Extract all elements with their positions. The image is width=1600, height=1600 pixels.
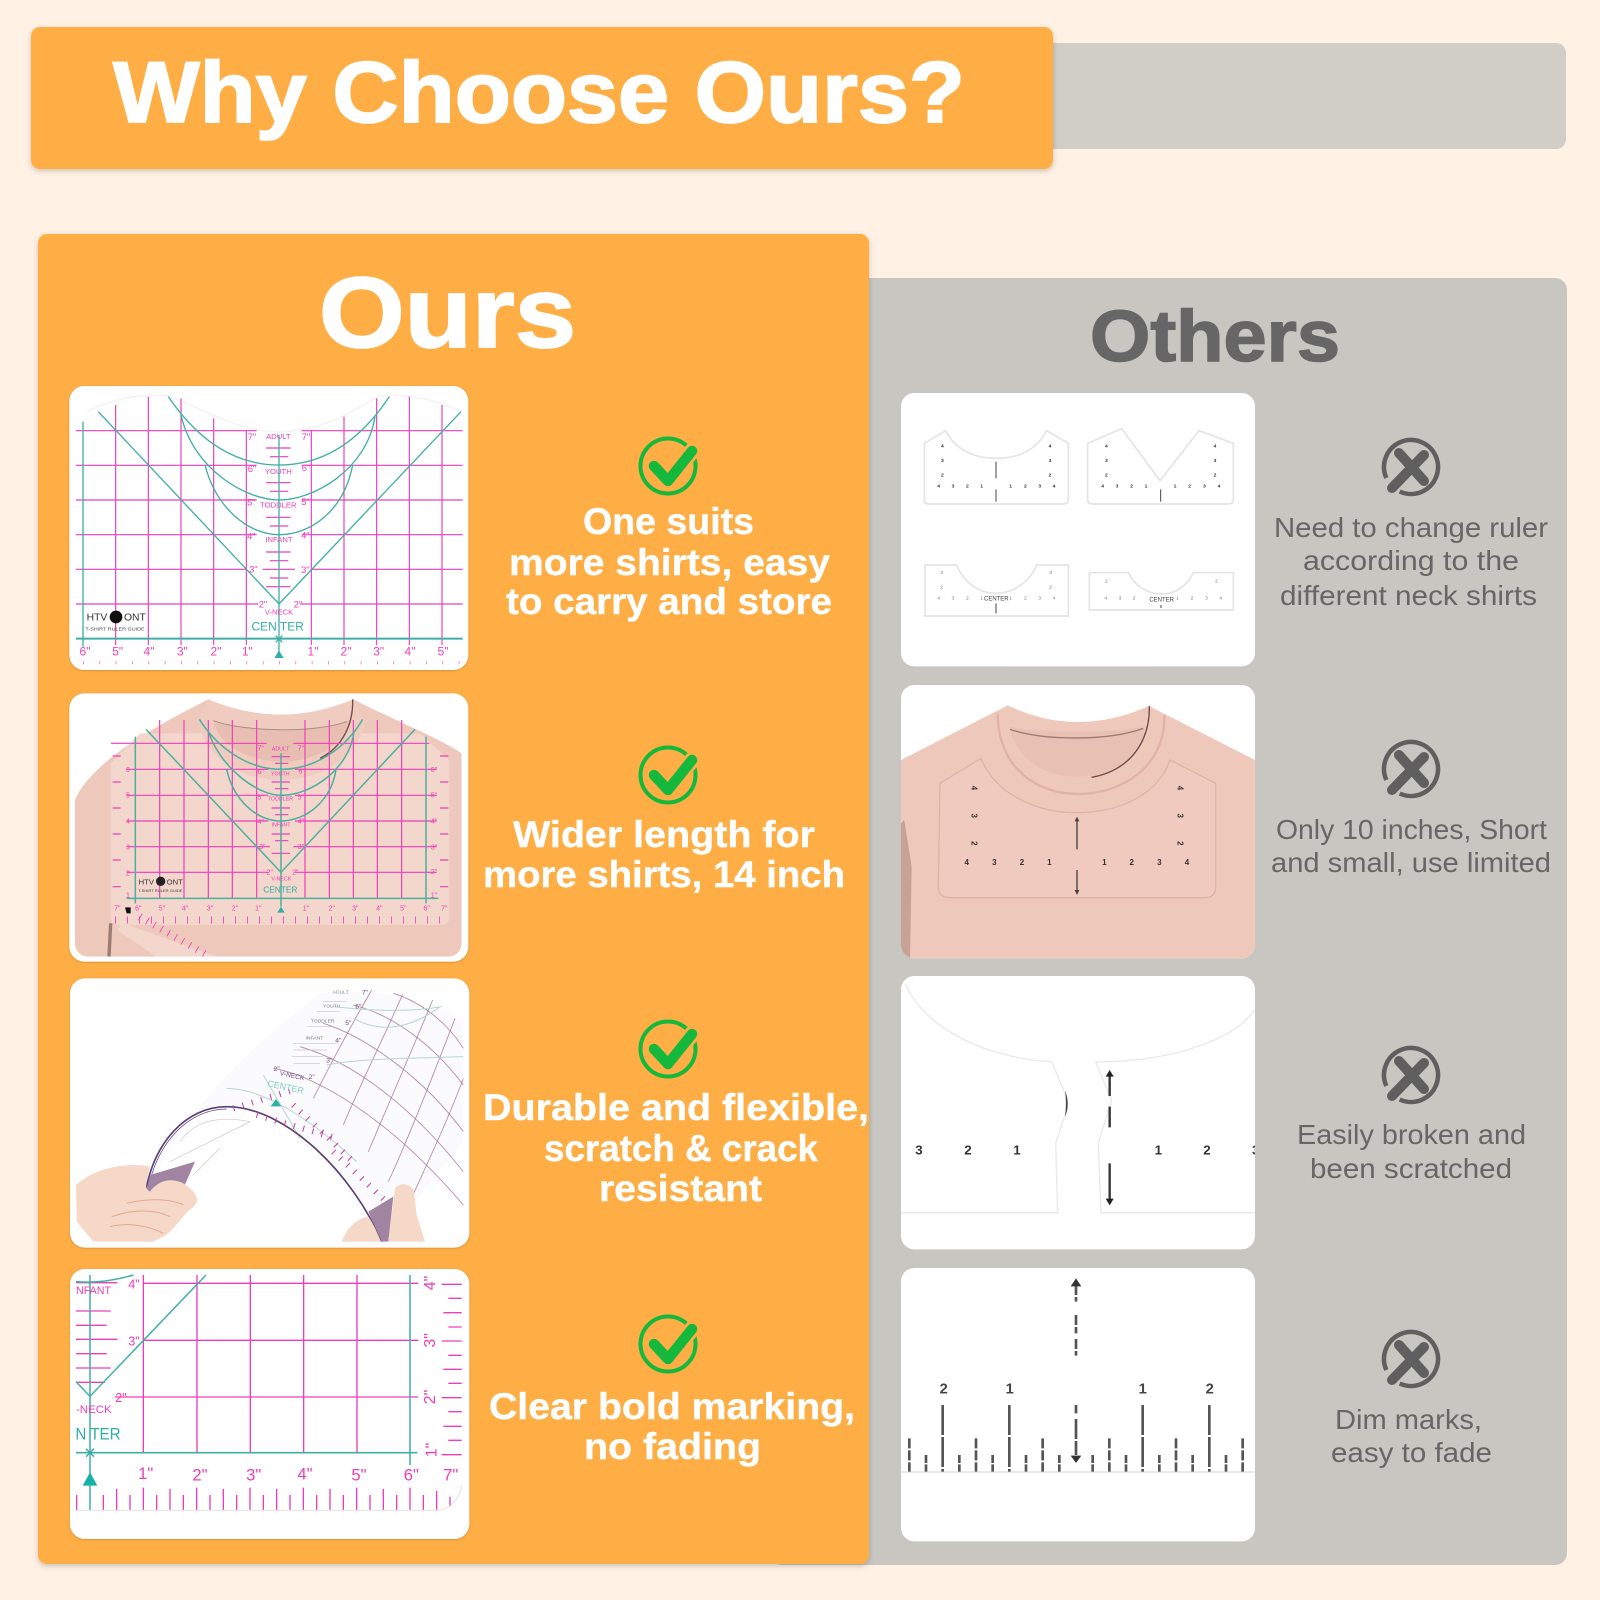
card: four small rulers: 2 xyxy=(1214,473,1217,479)
card: bending flexible ruler: 7" xyxy=(362,989,369,996)
card: ruler on pink shirt: 2 xyxy=(126,870,130,877)
text: dim marks: easy to fade xyxy=(1331,1437,1492,1468)
card: ruler on pink shirt: 4 xyxy=(126,818,130,825)
text: wider length: more shirts, 14 inch xyxy=(483,854,845,895)
card: ruler diagram: 2" xyxy=(294,599,302,609)
logo: HTV xyxy=(87,613,107,624)
text: need to change ruler: different neck shirts xyxy=(1280,580,1537,611)
card: ruler diagram: 3" xyxy=(177,645,188,659)
card: broken ruler closeup xyxy=(901,976,1259,1249)
card: ruler closeup: 4" xyxy=(422,1276,439,1290)
card: four small rulers: 3 xyxy=(1119,595,1122,601)
card: dim ruler marks xyxy=(901,1268,1255,1541)
card: short ruler on pink shirt xyxy=(901,685,1255,958)
heading: others: Others xyxy=(1090,297,1340,377)
card: four small rulers: 2 xyxy=(1191,595,1194,601)
card: four small rulers: 2 xyxy=(1049,473,1052,479)
card: broken ruler closeup: 2 xyxy=(1203,1142,1211,1157)
card: ruler on pink shirt: 3" xyxy=(259,844,266,851)
card: bending flexible ruler: 2" xyxy=(274,1066,280,1073)
text: only 10 inches: Only 10 inches, Short xyxy=(1276,814,1547,845)
card: ruler on pink shirt: 1" xyxy=(431,892,438,899)
title: Why Choose Ours? xyxy=(113,45,965,141)
card: ruler closeup: 1" xyxy=(424,1443,441,1457)
card: ruler closeup: -NECK xyxy=(76,1404,112,1416)
card: ruler diagram: 5" xyxy=(247,498,256,508)
text: easily broken: Easily broken and xyxy=(1297,1119,1526,1150)
card: ruler diagram: 6" xyxy=(80,645,90,659)
card: bending flexible ruler: 6" xyxy=(355,1003,362,1010)
card: four small rulers: 4 xyxy=(1049,444,1052,450)
text: durable and flexible: Durable and flexible, xyxy=(483,1087,869,1128)
card: bending flexible ruler: V-NECK xyxy=(279,1070,305,1082)
card: ruler diagram: 6" xyxy=(302,463,310,473)
card: bending flexible ruler: 2" xyxy=(309,1074,315,1081)
card: ruler diagram: 7" xyxy=(302,432,310,442)
card: ruler on pink shirt: T-SHIRT RULER GUIDE xyxy=(138,889,183,893)
card: ruler on pink shirt: ONT xyxy=(167,877,183,886)
card: four small rulers: CENTER xyxy=(984,597,1009,603)
card: broken ruler closeup: 1 xyxy=(1155,1142,1163,1157)
text: clear bold marking: no fading xyxy=(584,1426,761,1467)
card: ruler closeup: 3" xyxy=(422,1333,439,1348)
card: bending flexible ruler: 5" xyxy=(345,1020,352,1027)
card: ruler on pink shirt: 2" xyxy=(232,906,239,913)
icon: check 3 xyxy=(640,1022,696,1076)
text: dim marks: Dim marks, xyxy=(1335,1404,1482,1435)
card: four small rulers: 2 xyxy=(1133,595,1136,601)
card: dim ruler marks: 1 xyxy=(1006,1381,1014,1397)
card: ruler closeup: NFANT xyxy=(76,1285,111,1297)
card: ruler on pink shirt: 7" xyxy=(114,906,121,913)
card: ruler on pink shirt: 6" xyxy=(135,906,142,913)
text: only 10 inches xyxy=(1271,814,1551,878)
card: ruler diagram: ADULT xyxy=(266,432,291,441)
card: four small rulers: 3 xyxy=(1038,483,1041,489)
card: ruler on pink shirt: ADULT xyxy=(272,746,290,752)
card: ruler on pink shirt: 2" xyxy=(266,869,273,876)
text: wider length: Wider length for xyxy=(513,814,815,855)
card: ruler on pink shirt: 6" xyxy=(431,767,438,774)
logo: T-SHIRT RULER GUIDE xyxy=(85,626,145,632)
card: ruler on pink shirt: 4" xyxy=(257,819,264,826)
card: ruler diagram: 4" xyxy=(301,531,310,541)
card: four small rulers: 1 xyxy=(1145,483,1148,489)
card: four small rulers: 3 xyxy=(1205,595,1208,601)
heading: ours: Ours xyxy=(319,257,576,369)
card: ruler diagram: 5" xyxy=(112,645,123,659)
card: bending flexible ruler: CENTER xyxy=(267,1078,305,1096)
text: wider length xyxy=(483,814,845,895)
logo xyxy=(85,611,146,632)
card: ruler on pink shirt: YOUTH xyxy=(271,772,290,778)
card: ruler on pink shirt: 1" xyxy=(303,906,310,913)
card: four small rulers: CENTER xyxy=(1149,598,1175,604)
card: ruler diagram: CEN TER xyxy=(251,620,304,634)
text: dim marks xyxy=(1331,1404,1492,1468)
card: four small rulers: 3 xyxy=(1038,595,1041,601)
card: ruler on pink shirt: 6 xyxy=(126,767,130,774)
card: ruler on pink shirt: 3" xyxy=(431,844,438,851)
card: ruler on pink shirt: 5" xyxy=(159,906,166,913)
card: four small rulers: 4 xyxy=(1218,483,1221,489)
card: four small rulers xyxy=(901,393,1255,666)
card: bending flexible ruler: ADULT xyxy=(333,989,349,995)
card: four small rulers: 3 xyxy=(1049,458,1052,464)
panel: ours xyxy=(38,234,869,1564)
card: ruler on pink shirt: 3" xyxy=(352,906,359,913)
card: four small rulers: 4 xyxy=(941,444,944,450)
card: four small rulers: 2 xyxy=(1215,579,1218,585)
card: short ruler on pink shirt: 2 xyxy=(970,841,979,846)
card: ruler on pink shirt: V-NECK xyxy=(271,876,292,882)
card: broken ruler closeup: 1 xyxy=(1013,1142,1021,1157)
card: four small rulers: 4 xyxy=(937,595,940,601)
icon: cross 2 xyxy=(1375,733,1447,805)
card: four small rulers: 4 xyxy=(1053,595,1056,601)
icon: check 1 xyxy=(640,438,696,494)
text: durable and flexible: scratch & crack xyxy=(544,1128,818,1169)
card: four small rulers: 3 xyxy=(941,458,944,464)
card: ruler diagram: 5" xyxy=(438,645,448,659)
card: ruler on pink shirt: 4" xyxy=(376,906,383,913)
card: broken ruler closeup: 3 xyxy=(915,1142,923,1157)
card: ruler closeup: 2" xyxy=(192,1465,208,1484)
text: clear bold marking: Clear bold marking, xyxy=(489,1386,855,1427)
text: durable and flexible: resistant xyxy=(599,1168,762,1209)
card: short ruler on pink shirt: 4 xyxy=(964,858,969,867)
text: one suits more shirts: to carry and store xyxy=(506,581,832,622)
text: one suits more shirts: more shirts, easy xyxy=(509,542,830,583)
text: durable and flexible xyxy=(483,1087,869,1209)
card: ruler diagram: 4" xyxy=(405,645,415,659)
card: four small rulers: 2 xyxy=(1130,483,1133,489)
card: ruler diagram: 3" xyxy=(373,645,384,659)
card: four small rulers: 2 xyxy=(1188,483,1191,489)
card: ruler closeup: 4" xyxy=(128,1277,140,1291)
card: four small rulers: 1 xyxy=(980,483,983,489)
card: ruler on pink shirt: 5 xyxy=(126,792,130,799)
card: ruler on pink shirt: 3 xyxy=(126,844,130,851)
card: short ruler on pink shirt: 2 xyxy=(1129,858,1134,867)
gray header bar xyxy=(1000,43,1566,149)
card: four small rulers: 3 xyxy=(1203,483,1206,489)
card: ruler on pink shirt: 2" xyxy=(328,906,335,913)
card: ruler on pink shirt xyxy=(69,693,468,962)
card: ruler on pink shirt: 6" xyxy=(257,769,264,776)
text: one suits more shirts: One suits xyxy=(583,501,754,542)
card: ruler closeup: 7" xyxy=(443,1465,458,1484)
card: bending flexible ruler: YOUTH xyxy=(323,1003,341,1009)
card: ruler diagram: 6" xyxy=(248,464,256,474)
card: short ruler on pink shirt: 2 xyxy=(1020,858,1025,867)
card: ruler diagram: 3" xyxy=(249,564,258,574)
card: four small rulers: 3 xyxy=(952,483,955,489)
card: four small rulers: 4 xyxy=(1214,444,1217,450)
icon: check 4 xyxy=(640,1316,696,1372)
card: bending flexible ruler: 3" xyxy=(326,1057,333,1064)
card: four small rulers: 4 xyxy=(1104,595,1107,601)
text: clear bold marking xyxy=(489,1386,855,1467)
card: ruler on pink shirt: 6" xyxy=(423,906,430,913)
card: four small rulers: 4 xyxy=(1053,483,1056,489)
title banner xyxy=(31,27,1053,169)
card: ruler diagram: 2" xyxy=(211,645,221,659)
icon: cross 4 xyxy=(1375,1323,1447,1395)
card: four small rulers: 2 xyxy=(966,483,969,489)
card: ruler on pink shirt: 4" xyxy=(298,818,305,825)
card: ruler on pink shirt: TODDLER xyxy=(268,797,293,803)
card: ruler on pink shirt: 5" xyxy=(257,794,264,801)
card: four small rulers: 3 xyxy=(1049,570,1052,576)
card: four small rulers: 3 xyxy=(1214,458,1217,464)
card: ruler on pink shirt: 5" xyxy=(298,794,305,801)
card: four small rulers: 1 xyxy=(980,595,983,601)
card: four small rulers: 1 xyxy=(1174,483,1177,489)
card: ruler diagram: 1" xyxy=(242,645,253,659)
card: ruler closeup: N TER xyxy=(75,1425,121,1444)
card: four small rulers: 1 xyxy=(1009,595,1012,601)
card: ruler on pink shirt: 4" xyxy=(431,818,438,825)
card: ruler on pink shirt: 3" xyxy=(298,844,305,851)
card: ruler on pink shirt: 7" xyxy=(298,745,305,752)
card: four small rulers: 3 xyxy=(1116,483,1119,489)
card: short ruler on pink shirt: 3 xyxy=(1175,813,1184,818)
card: ruler on pink shirt: 4" xyxy=(182,906,189,913)
card: broken ruler closeup: 3 xyxy=(1252,1142,1259,1157)
card: four small rulers: 4 xyxy=(937,483,940,489)
card: ruler on pink shirt: 6" xyxy=(298,768,305,775)
icon: cross 1 xyxy=(1375,431,1447,503)
card: bending flexible ruler: 4" xyxy=(335,1038,342,1045)
card: short ruler on pink shirt: 4 xyxy=(970,786,979,791)
card: short ruler on pink shirt: 4 xyxy=(1185,858,1190,867)
card: ruler diagram: YOUTH xyxy=(265,467,292,476)
card: ruler closeup: 3" xyxy=(128,1334,140,1348)
text: need to change ruler: according to the xyxy=(1303,545,1519,576)
text: need to change ruler: Need to change ruler xyxy=(1274,512,1548,543)
card: short ruler on pink shirt: 2 xyxy=(1175,841,1184,846)
card: short ruler on pink shirt: 1 xyxy=(1047,858,1052,867)
card: ruler closeup xyxy=(70,1269,469,1539)
card: ruler on pink shirt: 5" xyxy=(431,792,438,799)
card: ruler on pink shirt: 3" xyxy=(207,906,214,913)
card: four small rulers: 2 xyxy=(941,473,944,479)
card: four small rulers: 2 xyxy=(1024,483,1027,489)
card: ruler closeup: 2" xyxy=(422,1390,439,1404)
card: four small rulers: 2 xyxy=(1105,579,1108,585)
card: ruler diagram xyxy=(69,386,468,670)
card: ruler on pink shirt: 2" xyxy=(292,869,299,876)
card: ruler on pink shirt: 5" xyxy=(400,906,407,913)
card: ruler on pink shirt: 1" xyxy=(255,906,262,913)
card: short ruler on pink shirt: 3 xyxy=(1157,858,1162,867)
icon: cross 3 xyxy=(1375,1039,1447,1111)
card: ruler on pink shirt: HTV xyxy=(139,877,155,886)
card: broken ruler closeup: 2 xyxy=(964,1142,972,1157)
card: ruler diagram: 4" xyxy=(247,531,256,541)
card: bending flexible ruler xyxy=(70,978,469,1248)
card: four small rulers: 2 xyxy=(1024,595,1027,601)
card: ruler closeup: 3" xyxy=(246,1465,261,1484)
card: dim ruler marks: 2 xyxy=(940,1381,948,1397)
card: four small rulers: 2 xyxy=(940,584,943,590)
text: one suits more shirts xyxy=(506,501,832,622)
card: four small rulers: 4 xyxy=(1105,444,1108,450)
text: only 10 inches: and small, use limited xyxy=(1271,847,1551,878)
card: four small rulers: 2 xyxy=(966,595,969,601)
card: ruler closeup: 4" xyxy=(297,1465,313,1484)
card: ruler diagram: 2" xyxy=(259,599,267,609)
card: ruler on pink shirt: 7" xyxy=(441,906,448,913)
text: easily broken xyxy=(1297,1119,1526,1184)
card: bending flexible ruler: INFANT xyxy=(305,1036,323,1042)
card: four small rulers: 2 xyxy=(1049,584,1052,590)
card: short ruler on pink shirt: 3 xyxy=(970,813,979,818)
card: ruler on pink shirt: 1 xyxy=(126,892,130,899)
card: ruler closeup: 5" xyxy=(351,1465,367,1484)
card: ruler on pink shirt: INFANT xyxy=(272,822,291,828)
card: ruler closeup: 1" xyxy=(138,1464,153,1483)
card: ruler diagram: 2" xyxy=(341,645,351,659)
panel: others xyxy=(770,278,1567,1565)
card: ruler diagram: 3" xyxy=(301,565,310,575)
logo: ONT xyxy=(124,613,146,624)
card: ruler diagram: V-NECK xyxy=(265,608,294,617)
card: ruler diagram: INFANT xyxy=(265,535,293,544)
card: four small rulers: 2 xyxy=(1105,473,1108,479)
card: four small rulers: 1 xyxy=(1176,595,1179,601)
icon: check 2 xyxy=(640,748,696,802)
card: four small rulers: 3 xyxy=(1105,458,1108,464)
card: dim ruler marks: 1 xyxy=(1139,1381,1147,1397)
card: ruler on pink shirt: 2" xyxy=(431,869,438,876)
card: four small rulers: 1 xyxy=(1009,483,1012,489)
card: four small rulers: 4 xyxy=(1219,595,1222,601)
text: easily broken: been scratched xyxy=(1310,1153,1512,1184)
card: ruler diagram: 1" xyxy=(308,645,318,659)
card: ruler diagram: 4" xyxy=(144,645,154,659)
card: ruler diagram: 5" xyxy=(301,497,310,507)
card: dim ruler marks: 2 xyxy=(1206,1381,1214,1397)
card: ruler diagram: TODDLER xyxy=(260,500,297,509)
card: short ruler on pink shirt: 4 xyxy=(1175,786,1184,791)
card: ruler on pink shirt: 7" xyxy=(257,745,264,752)
card: four small rulers: 3 xyxy=(952,595,955,601)
card: ruler closeup: 6" xyxy=(404,1465,419,1484)
card: four small rulers: 4 xyxy=(1101,483,1104,489)
card: ruler closeup: 2" xyxy=(115,1391,127,1405)
card: ruler diagram: 7" xyxy=(248,432,256,442)
card: short ruler on pink shirt: 3 xyxy=(992,858,997,867)
card: four small rulers: 3 xyxy=(940,570,943,576)
text: need to change ruler xyxy=(1274,512,1548,611)
card: bending flexible ruler: TODDLER xyxy=(311,1018,335,1024)
card: ruler on pink shirt: CENTER xyxy=(263,884,297,894)
card: short ruler on pink shirt: 1 xyxy=(1102,858,1107,867)
